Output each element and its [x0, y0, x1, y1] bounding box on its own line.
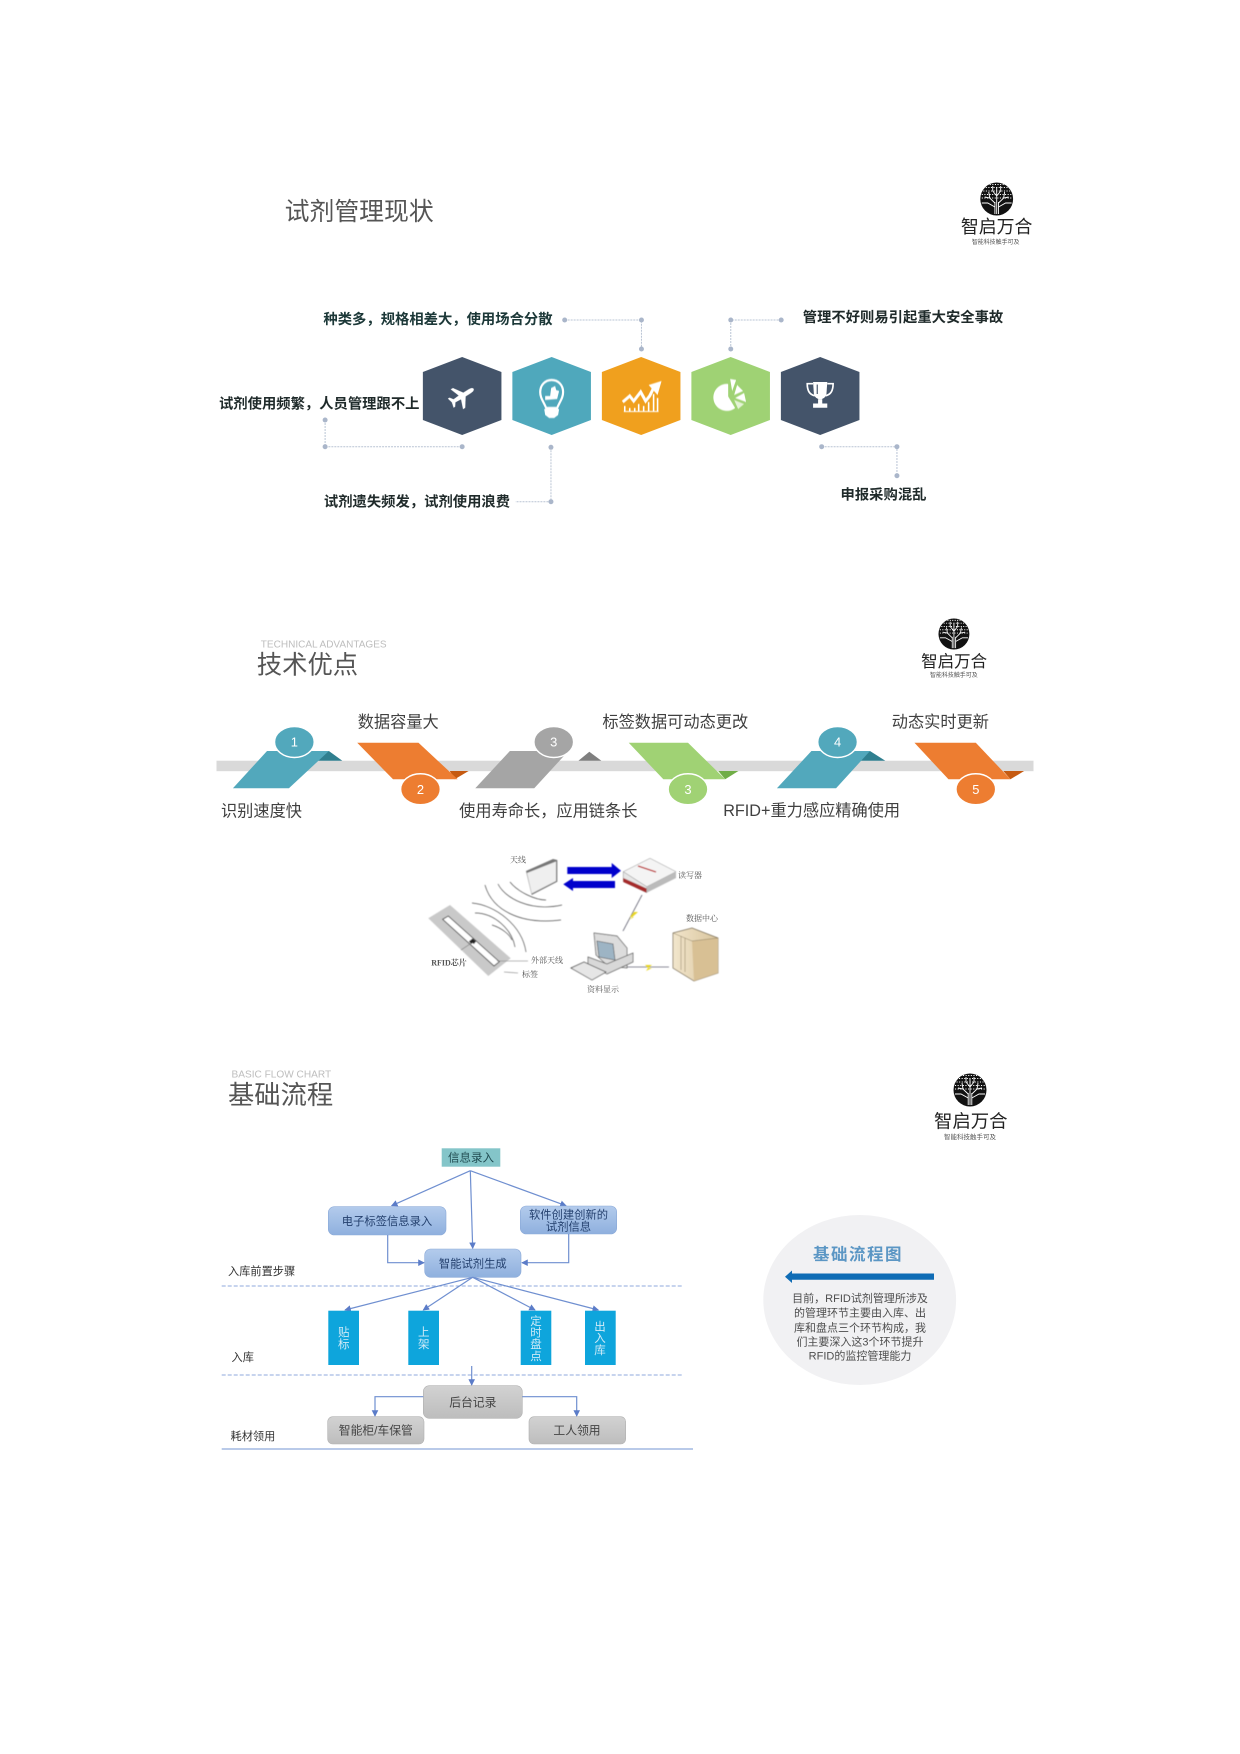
panel: reagent management status — [219, 182, 1033, 511]
diagram: RFID system: 读写器 — [678, 870, 702, 880]
waves — [472, 882, 562, 952]
panel: technical advantages — [217, 618, 1033, 994]
ribbon 5: RFID plus gravity sensing — [777, 726, 885, 788]
label: dynamic tag data: 标签数据可动态更改 — [602, 713, 748, 732]
computer — [594, 933, 627, 968]
logo: middle section: 智能科技触手可及 — [930, 671, 978, 679]
reader — [623, 858, 676, 887]
step: labeling — [328, 1311, 359, 1365]
diagram: RFID system: 标签 — [522, 969, 538, 979]
ribbon 4: dynamic tag data: 3 — [684, 782, 692, 797]
callout text: RFID的监控管理能力 — [809, 1349, 911, 1363]
step: shelving — [408, 1311, 439, 1365]
label: frequent use: 试剂使用频繁，人员管理跟不上 — [219, 394, 419, 413]
callout title: 基础流程图 — [813, 1245, 903, 1264]
arrow: steps to backend record — [471, 1366, 473, 1385]
arrows — [567, 863, 621, 878]
box: worker collection: 工人领用 — [553, 1424, 601, 1438]
box: backend record: 后台记录 — [449, 1396, 497, 1410]
tag — [428, 905, 511, 976]
hexagon: lightbulb — [512, 357, 591, 435]
box: software created reagent info — [520, 1206, 617, 1234]
step: check-out: 库 — [594, 1343, 606, 1357]
links — [623, 895, 642, 931]
step: scheduled inventory: 定 — [530, 1314, 542, 1328]
flow chart — [222, 1148, 693, 1449]
subtitle: technical advantages: TECHNICAL ADVANTAGES — [261, 639, 387, 651]
callout text — [792, 1291, 928, 1363]
label: safety accidents: 管理不好则易引起重大安全事故 — [803, 308, 1004, 326]
label: consumable collection: 耗材领用 — [230, 1429, 275, 1443]
server — [673, 928, 718, 981]
step: labeling: 贴 — [338, 1325, 350, 1339]
logo: bottom section: 智能科技触手可及 — [944, 1132, 996, 1141]
step: scheduled inventory: 盘 — [530, 1337, 542, 1351]
timeline bar — [217, 761, 1033, 771]
callout text: 的管理环节主要由入库、出 — [794, 1306, 926, 1320]
box: electronic tag entry: 电子标签信息录入 — [342, 1214, 432, 1228]
box: smart reagent generation: 智能试剂生成 — [439, 1256, 507, 1270]
step: check-out — [585, 1311, 616, 1365]
ribbon 1: recognition speed: 1 — [291, 734, 298, 750]
label: real-time updates: 动态实时更新 — [892, 713, 989, 732]
callout text: 库和盘点三个环节构成，我 — [794, 1320, 926, 1334]
step: check-out: 入 — [594, 1332, 606, 1345]
ribbon 2: data capacity: 2 — [417, 782, 424, 797]
section dividers — [222, 1286, 683, 1375]
box: software created reagent info: 软件创建创新的 — [529, 1208, 608, 1222]
step: scheduled inventory: 点 — [530, 1350, 542, 1363]
antenna — [526, 859, 557, 895]
logo: top section: 智能科技触手可及 — [972, 238, 1019, 246]
box: smart reagent generation — [425, 1249, 521, 1277]
logo: bottom section: 智启万合 — [934, 1110, 1008, 1132]
ribbon 5: RFID plus gravity sensing: 4 — [834, 734, 841, 750]
label: RFID plus gravity sensing: RFID+重力感应精确使用 — [723, 801, 900, 820]
logo: top section — [961, 182, 1033, 246]
logo: top section: 智启万合 — [961, 217, 1033, 237]
label: warehousing: 入库 — [232, 1350, 254, 1364]
step: shelving: 架 — [418, 1338, 429, 1351]
arrows: generation to steps — [345, 1277, 598, 1310]
connector: frequent use — [323, 418, 465, 449]
callout text: 目前，RFID试剂管理所涉及 — [792, 1291, 928, 1305]
diagram: RFID system — [428, 854, 719, 994]
connector: reagent loss — [515, 445, 553, 504]
logo: middle section: 智启万合 — [921, 652, 988, 671]
label: many kinds: 种类多，规格相差大，使用场合分散 — [323, 310, 553, 328]
label: data capacity: 数据容量大 — [358, 713, 439, 732]
box: smart cabinet storage: 智能柜/车保管 — [339, 1424, 413, 1438]
callout arrow — [785, 1270, 934, 1283]
diagram: RFID system: 数据中心 — [686, 913, 719, 923]
box: information entry: 信息录入 — [448, 1150, 494, 1164]
step: shelving: 上 — [418, 1326, 429, 1339]
callout text: 们主要深入这3个环节提升 — [796, 1335, 924, 1349]
step: labeling: 标 — [338, 1338, 349, 1351]
step: scheduled inventory — [521, 1311, 551, 1365]
connector: many kinds — [562, 318, 644, 352]
diagram: RFID system: 天线 — [510, 854, 526, 865]
ribbon 1: recognition speed — [233, 726, 342, 788]
ribbon 3: long service life — [475, 726, 601, 788]
label: reagent loss: 试剂遗失频发，试剂使用浪费 — [324, 492, 510, 511]
subtitle: basic flow chart: BASIC FLOW CHART — [232, 1070, 331, 1080]
panel: basic flow chart — [222, 1070, 1008, 1449]
box: worker collection — [529, 1417, 626, 1444]
connector: safety accidents — [728, 318, 784, 352]
hexagon: plane — [423, 357, 501, 435]
step: scheduled inventory: 时 — [530, 1326, 542, 1340]
diagram: RFID system: 外部天线 — [531, 955, 563, 965]
box: electronic tag entry — [328, 1207, 446, 1235]
connector: procurement chaos — [819, 444, 899, 478]
ribbon 3: long service life: 3 — [550, 734, 557, 750]
label: pre-storage steps: 入库前置步骤 — [228, 1264, 295, 1278]
title: reagent management status: 试剂管理现状 — [285, 198, 434, 226]
step: check-out: 出 — [594, 1320, 606, 1334]
label: recognition speed: 识别速度快 — [221, 802, 302, 821]
ribbon 6: real-time updates: 5 — [972, 782, 979, 797]
logo: bottom section — [934, 1074, 1008, 1141]
ribbon 2: data capacity — [357, 743, 469, 805]
arrows: into generation — [388, 1234, 569, 1263]
arrows: entry to branches — [392, 1171, 566, 1248]
label: long service life: 使用寿命长，应用链条长 — [459, 801, 637, 821]
box: information entry — [442, 1148, 500, 1167]
title: basic flow chart: 基础流程 — [228, 1080, 333, 1110]
ribbon 6: real-time updates — [914, 743, 1024, 805]
diagram: RFID system: RFID芯片 — [431, 958, 467, 968]
box: smart cabinet storage — [328, 1417, 424, 1444]
ribbon 4: dynamic tag data — [629, 743, 738, 805]
callout: flow chart description — [763, 1215, 956, 1385]
hexagon: rising chart — [602, 357, 680, 435]
hexagon: trophy — [781, 357, 859, 435]
box: backend record — [423, 1386, 522, 1418]
logo: middle section — [921, 618, 988, 679]
label: procurement chaos: 申报采购混乱 — [841, 485, 926, 504]
hexagon: pie chart — [691, 357, 770, 435]
diagram: RFID system: 资料显示 — [587, 984, 620, 994]
hexagon row with icons — [423, 357, 859, 435]
title: technical advantages: 技术优点 — [257, 651, 358, 680]
box: software created reagent info: 试剂信息 — [546, 1220, 591, 1234]
arrows: backend to destinations — [375, 1397, 577, 1416]
